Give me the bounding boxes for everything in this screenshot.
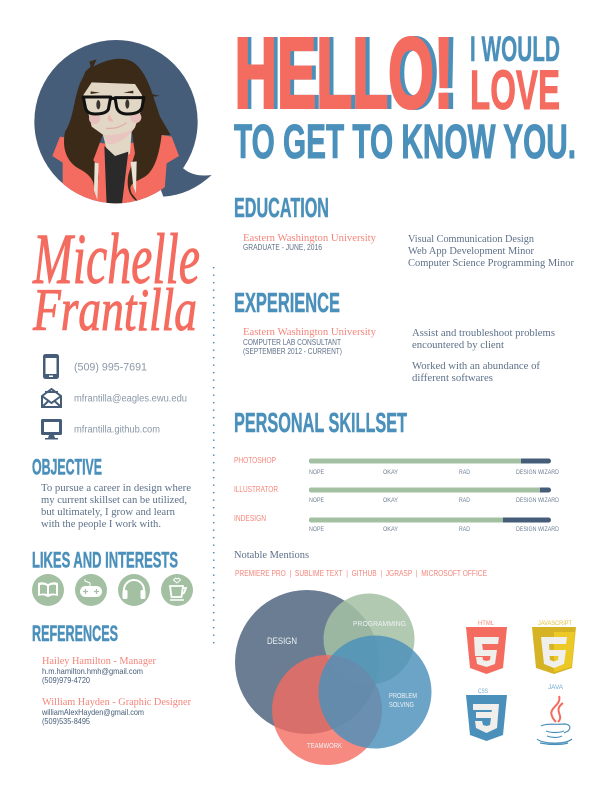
skill: illustrator: RAD — [459, 497, 470, 504]
website: mfrantilla.github.com — [74, 425, 160, 436]
skill: photoshop: DESIGN WIZARD — [516, 469, 559, 476]
objective text: my current skillset can be utilized, — [41, 495, 187, 506]
degrees — [408, 234, 574, 269]
label: problem solving — [389, 693, 417, 709]
icon: monitor — [41, 419, 62, 440]
panel: experience — [234, 287, 555, 384]
icon: envelope — [42, 389, 61, 407]
panel: likes and interests — [32, 548, 193, 606]
heading: EXPERIENCE — [234, 287, 340, 318]
skill: photoshop — [234, 455, 559, 476]
panel: references — [32, 621, 191, 726]
school — [243, 232, 376, 252]
objective text — [41, 483, 191, 530]
label: problem solving: SOLVING — [389, 702, 414, 709]
skill: indesign: INDESIGN — [234, 513, 266, 523]
employer — [243, 326, 376, 356]
headline — [234, 18, 576, 169]
avatar illustration — [52, 59, 179, 207]
HELLO!: HELLO! — [234, 18, 454, 130]
circle: problem solving — [318, 636, 432, 748]
label: teamwork: TEAMWORK — [307, 743, 342, 750]
skill: indesign: OKAY — [383, 526, 399, 533]
reference 1: Hailey Hamilton - Manager — [42, 655, 156, 667]
circle: design — [235, 590, 379, 734]
icon: book — [32, 574, 64, 606]
icon: javascript: JAVASCRIPT — [538, 620, 572, 627]
portrait speech bubble — [34, 40, 212, 207]
reference 2: (509)535-8495 — [42, 716, 90, 726]
degrees: Computer Science Programming Minor — [408, 258, 574, 269]
skill: illustrator: DESIGN WIZARD — [516, 497, 559, 504]
venn diagram — [235, 590, 432, 765]
objective text: with the people I work with. — [41, 519, 161, 530]
phone number: (509) 995-7691 — [74, 362, 147, 374]
icon: java — [537, 684, 572, 744]
duties: Assist and troubleshoot problems — [412, 328, 555, 339]
heading: OBJECTIVE — [32, 454, 102, 480]
skill: photoshop: PHOTOSHOP — [234, 455, 276, 465]
skill: photoshop: NOPE — [309, 469, 325, 476]
employer: Eastern Washington University — [243, 326, 376, 338]
last name: Frantilla — [32, 277, 197, 343]
degrees: Web App Development Minor — [408, 246, 534, 257]
skill: indesign: NOPE — [309, 526, 325, 533]
skill: indesign: RAD — [459, 526, 470, 533]
notable mentions list: PREMIERE PRO | SUBLIME TEXT | GITHUB | JGRASP | MICROSOFT OFFICE — [235, 569, 487, 578]
circle: teamwork — [272, 655, 382, 765]
skill: illustrator — [234, 484, 559, 504]
icon: java: JAVA — [548, 684, 564, 691]
skill: photoshop: RAD — [459, 469, 470, 476]
heading: LIKES AND INTERESTS — [32, 548, 178, 572]
employer: COMPUTER LAB CONSULTANT — [243, 338, 341, 347]
circle: programming — [324, 594, 414, 684]
reference 1: h.m.hamilton.hmh@gmail.com — [42, 666, 143, 676]
employer: (SEPTEMBER 2012 - CURRENT) — [243, 347, 342, 356]
email: mfrantilla@eagles.ewu.edu — [74, 394, 187, 404]
reference 2: williamAlexHayden@gmail.com — [41, 707, 144, 717]
icon: headphones — [118, 574, 150, 606]
skill: indesign — [234, 513, 559, 533]
icon: phone — [43, 354, 59, 379]
icon: css3: CSS — [478, 688, 488, 695]
icon: game controller — [75, 574, 107, 606]
reference 1: (509)979-4720 — [42, 675, 90, 685]
duties: Worked with an abundance of — [412, 361, 541, 372]
heading: PERSONAL SKILLSET — [234, 407, 407, 438]
icon: css3 — [466, 688, 507, 741]
heading: EDUCATION — [234, 192, 329, 223]
panel: personal skillset — [234, 407, 559, 578]
label: problem solving: PROBLEM — [389, 693, 417, 700]
reference 1 — [42, 655, 156, 685]
dotted divider — [213, 267, 215, 648]
panel: education — [234, 192, 574, 269]
school: GRADUATE - JUNE, 2016 — [243, 243, 322, 252]
icon: html5: HTML — [478, 620, 494, 627]
contact block — [41, 354, 187, 440]
notable mentions heading: Notable Mentions — [234, 550, 309, 561]
icon: javascript — [532, 620, 576, 674]
objective text: but ultimately, I grow and learn — [41, 507, 176, 518]
reference 2 — [41, 696, 191, 726]
objective text: To pursue a career in design where — [41, 483, 191, 494]
first name: Michelle — [32, 219, 200, 299]
icon: coffee cup — [161, 574, 193, 606]
duties: encountered by client — [412, 340, 504, 351]
panel: objective — [32, 454, 191, 530]
reference 2: William Hayden - Graphic Designer — [42, 696, 191, 708]
skill: illustrator: OKAY — [383, 497, 399, 504]
HELLO! shadow: HELLO! — [238, 18, 458, 130]
school: Eastern Washington University — [243, 232, 376, 244]
skill: illustrator: NOPE — [309, 497, 325, 504]
skill: photoshop: OKAY — [383, 469, 399, 476]
skill: indesign: DESIGN WIZARD — [516, 526, 559, 533]
label: programming: PROGRAMMING — [353, 621, 406, 628]
bubble — [34, 40, 212, 203]
icon: html5 — [466, 620, 507, 674]
duties: different softwares — [412, 373, 493, 384]
duties — [412, 328, 555, 384]
name — [32, 219, 200, 343]
heading: REFERENCES — [32, 621, 118, 646]
label: design: DESIGN — [267, 636, 297, 646]
skill: illustrator: ILLUSTRATOR — [234, 484, 278, 494]
degrees: Visual Communication Design — [408, 234, 535, 245]
